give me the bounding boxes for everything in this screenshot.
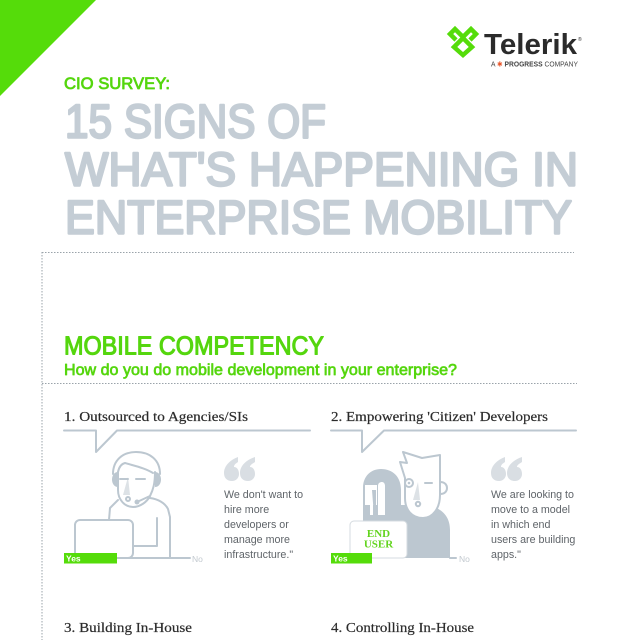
heading: 2. Empowering 'Citizen' Developers [331,410,548,425]
yes bar [64,553,117,564]
icon: quotation mark [491,457,522,481]
quote [491,489,575,561]
end user label: END [367,528,390,540]
no label: No [192,554,203,564]
logo: Telerik [450,29,582,68]
registered mark: ® [578,36,582,43]
quote: infrastructure." [224,549,293,561]
quote: developers or [224,519,289,531]
title: WHAT'S HAPPENING IN [65,142,578,196]
icon: Telerik mark [450,29,476,55]
icon: end user and developer: USER [364,538,394,550]
panel: sign 2: Yes [333,554,348,564]
icon: headset person at laptop [75,452,190,558]
quote: users are building [491,534,575,546]
speech line [331,430,576,452]
quote: move to a model [491,504,570,516]
title: 15 SIGNS OF [65,94,326,148]
quote [224,489,303,561]
eyebrow: CIO SURVEY: [64,74,170,93]
green corner triangle [0,0,96,96]
heading: sign 4: 4. Controlling In-House [331,621,474,636]
quote: We don't want to [224,489,303,501]
tagline: A ✱ PROGRESS COMPANY [491,60,578,68]
quote: manage more [224,534,290,546]
quote: hire more [224,504,269,516]
heading: 1. Outsourced to Agencies/SIs [64,410,248,425]
heading: sign 3: 3. Building In-House [64,621,192,636]
panel: sign 1: Yes [66,554,81,564]
quote: apps." [491,549,521,561]
icon: quotation mark [224,457,255,481]
panel: sign 1 [64,410,310,564]
wordmark: Telerik [484,29,578,61]
panel: sign 2 [331,410,576,564]
section question: How do you do mobile development in your enterprise? [64,362,457,379]
quote: in which end [491,519,550,531]
speech line [64,430,310,452]
title: ENTERPRISE MOBILITY [65,190,572,244]
icon: end user and developer [350,452,456,558]
quote: We are looking to [491,489,574,501]
no label: No [459,554,470,564]
yes bar [331,553,372,564]
title [65,94,578,244]
section heading: MOBILE COMPETENCY [64,332,324,360]
